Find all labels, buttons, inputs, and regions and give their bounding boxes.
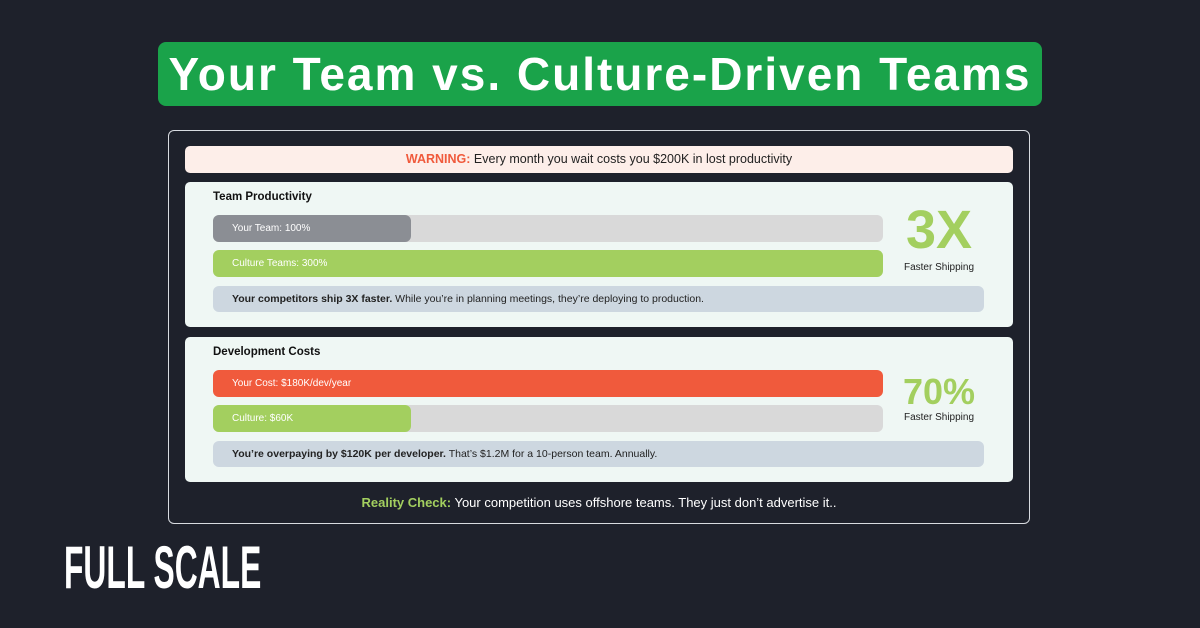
bar chart: productivity: Your Team: 100% — [232, 223, 310, 234]
warning bar: WARNING: Every month you wait costs you $200K in lost productivity — [406, 152, 792, 166]
note — [213, 441, 984, 467]
stat label: Faster Shipping — [904, 412, 974, 423]
bar chart: costs: Your Cost: $180K/dev/year — [232, 378, 351, 389]
title: Your Team vs. Culture-Driven Teams — [168, 48, 1032, 100]
stat label: Faster Shipping — [904, 262, 974, 273]
main container — [168, 130, 1030, 524]
bar chart: costs — [213, 370, 883, 432]
stat: 70%: 70% — [903, 371, 975, 412]
bar chart: productivity: Culture Teams: 300% — [232, 258, 327, 269]
stat: 3X: 3X — [906, 200, 972, 260]
panel: team productivity — [185, 182, 1013, 327]
note: You’re overpaying by $120K per developer. That’s $1.2M for a 10-person team. Annually. — [232, 448, 657, 460]
note: Your competitors ship 3X faster. While you’re in planning meetings, they’re deploying to production. — [232, 293, 704, 305]
warning bar — [185, 146, 1013, 173]
note — [213, 286, 984, 312]
bar chart: costs: Culture: $60K — [232, 413, 293, 424]
bar chart: productivity — [213, 215, 883, 277]
logo: FULL SCALE: FULL SCALE — [64, 534, 261, 601]
heading: Team Productivity — [213, 191, 312, 203]
reality check: Reality Check: Your competition uses offshore teams. They just don’t advertise it.. — [362, 495, 836, 510]
panel: development costs — [185, 337, 1013, 482]
heading: Development Costs — [213, 346, 320, 358]
